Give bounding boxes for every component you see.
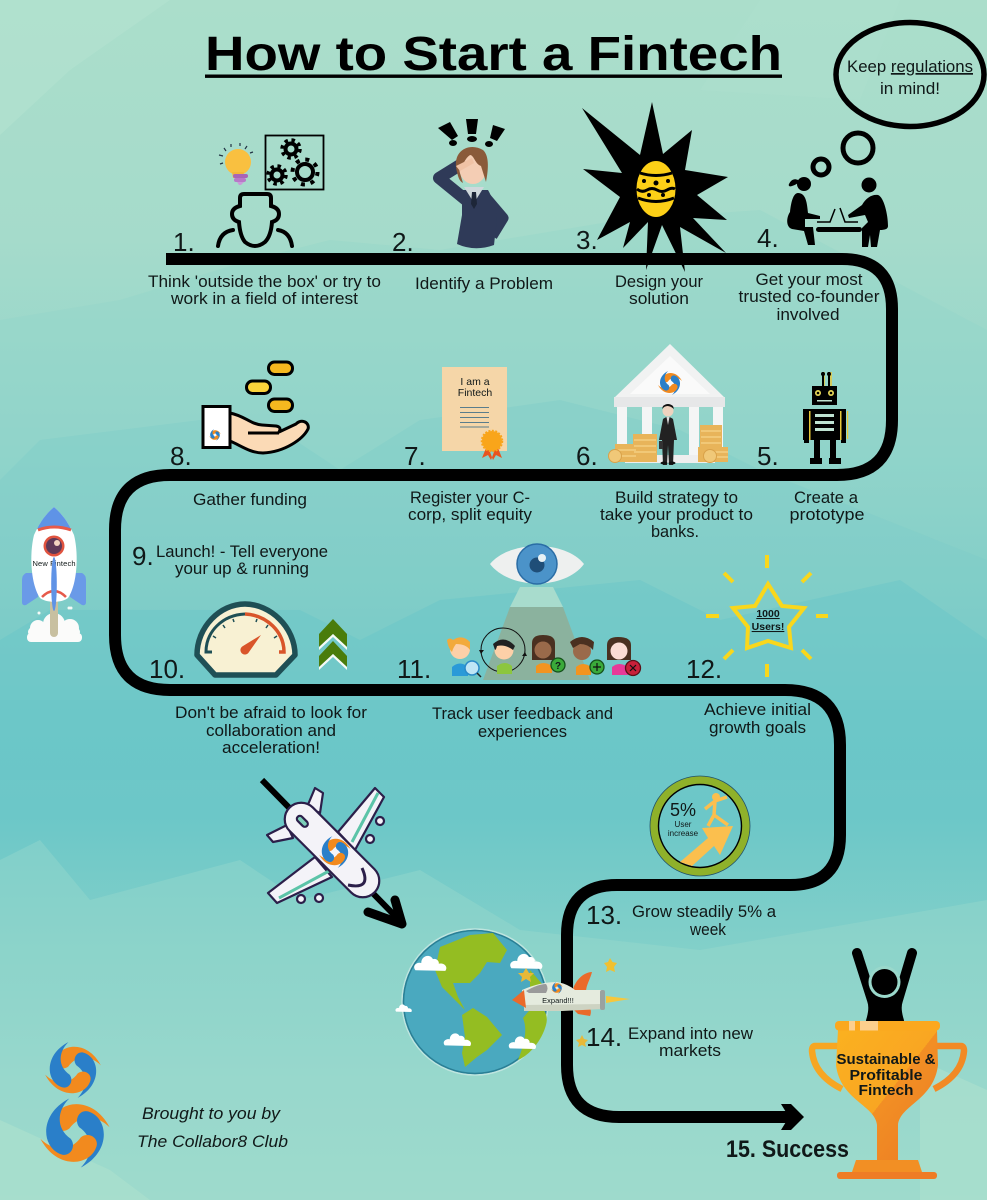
icon: person lifting trophy: Profitable xyxy=(850,1067,922,1084)
step 4 caption: involved xyxy=(776,305,840,324)
step number 12: 12. xyxy=(686,654,722,684)
icon: expand rocket ship xyxy=(512,958,630,1047)
step 5 caption xyxy=(790,488,864,524)
step 14 caption xyxy=(628,1024,754,1060)
thought bubble: keep regulations in mind: Keep regulations xyxy=(847,57,973,76)
icon: star badge 1000 users: Users! xyxy=(752,621,784,633)
step 4 xyxy=(738,177,888,324)
icon: gears box xyxy=(266,136,324,190)
icon: starburst with golden egg xyxy=(582,102,728,272)
credit text xyxy=(137,1104,288,1151)
step 3 caption xyxy=(615,272,703,308)
icon: incorporation certificate: I am a xyxy=(460,376,490,388)
icon: person lifting trophy: Fintech xyxy=(858,1082,914,1099)
roadmap path with arrow xyxy=(115,259,892,1130)
step number 9: 9. xyxy=(132,541,154,571)
icon: expand rocket ship: Expand!!! xyxy=(542,996,574,1005)
thought bubble: keep regulations in mind: in mind! xyxy=(880,79,940,98)
step 12 caption xyxy=(704,700,811,737)
thought bubble: keep regulations in mind xyxy=(813,22,984,175)
icon: five percent growth circle: 5% xyxy=(670,800,696,820)
step 7 caption: corp, split equity xyxy=(408,505,532,524)
step 8 caption: Gather funding xyxy=(193,490,307,509)
step 1 caption: work in a field of interest xyxy=(170,289,358,308)
step 12 xyxy=(686,555,828,737)
icon: hand catching coins xyxy=(203,362,308,453)
step 10 caption: collaboration and xyxy=(206,721,336,740)
step 3 xyxy=(576,102,728,308)
step 4 caption: Get your most xyxy=(756,270,863,289)
icon: airplane on flight arrow xyxy=(262,780,402,924)
icon: watching eye with beam xyxy=(483,544,590,680)
step 5 caption: Create a xyxy=(794,488,859,507)
step 11 xyxy=(397,544,640,741)
step 7 caption xyxy=(408,488,532,524)
step 13 caption: Grow steadily 5% a xyxy=(632,902,777,921)
icon: incorporation certificate xyxy=(442,367,507,460)
step 2 caption: Identify a Problem xyxy=(415,274,553,293)
step 11 caption xyxy=(432,704,613,741)
icon: star badge 1000 users: 1000 xyxy=(756,608,780,620)
step 14 xyxy=(586,1022,754,1060)
credit text: The Collabor8 Club xyxy=(137,1132,288,1151)
step 10 caption xyxy=(175,703,367,757)
icon: worried woman with exclamation marks xyxy=(438,119,505,248)
step number 5: 5. xyxy=(757,441,779,471)
step 6 caption: banks. xyxy=(651,522,699,541)
step number 3: 3. xyxy=(576,225,598,255)
icon: five percent growth circle xyxy=(650,776,750,876)
icon: person with hat xyxy=(218,194,292,246)
step 1 xyxy=(148,136,381,308)
step 13 xyxy=(586,900,777,939)
step number 14: 14. xyxy=(586,1022,622,1052)
step 2 xyxy=(392,119,553,293)
icon: co-founders at a table xyxy=(787,177,888,247)
step 12 caption: Achieve initial xyxy=(704,700,811,719)
icon: speedometer gauge xyxy=(197,604,295,675)
icon: person lifting trophy: Sustainable & xyxy=(836,1051,936,1068)
icon: star badge 1000 users xyxy=(706,555,828,677)
step 15: success label: 15. Success xyxy=(726,1136,849,1163)
step 12 caption: growth goals xyxy=(709,718,806,737)
step number 7: 7. xyxy=(404,441,426,471)
step number 11: 11. xyxy=(397,654,431,684)
icon: new fintech rocket xyxy=(22,507,86,642)
step 5 xyxy=(757,372,864,524)
step 9 xyxy=(22,507,328,642)
step 11 caption: experiences xyxy=(478,722,567,741)
step 9 caption: Launch! - Tell everyone xyxy=(156,542,328,561)
step 6 caption: take your product to xyxy=(600,505,753,524)
step 10 xyxy=(149,604,367,757)
step number 8: 8. xyxy=(170,441,192,471)
step 14 caption: markets xyxy=(659,1041,721,1060)
step 10 caption: acceleration! xyxy=(222,738,320,757)
icon: person lifting trophy xyxy=(812,953,964,1179)
credit text: Brought to you by xyxy=(142,1104,282,1123)
step number 1: 1. xyxy=(173,227,195,257)
step number 2: 2. xyxy=(392,227,414,257)
step 3 caption: solution xyxy=(629,289,689,308)
title: How to Start a Fintech xyxy=(205,28,782,81)
step 8 xyxy=(170,362,308,509)
step 9 caption: your up & running xyxy=(175,559,309,578)
step 6 caption: Build strategy to xyxy=(615,488,738,507)
step 11 caption: Track user feedback and xyxy=(432,704,613,723)
icon: five percent growth circle: User xyxy=(675,820,692,829)
step 5 caption: prototype xyxy=(790,505,864,524)
step 7 caption: Register your C- xyxy=(410,488,530,507)
step 3 caption: Design your xyxy=(615,272,703,291)
icon: robot prototype xyxy=(803,372,848,464)
step 6 caption xyxy=(600,488,753,541)
step 13 caption: week xyxy=(689,920,726,939)
icon: user group with feedback badges: ? xyxy=(555,661,561,672)
step 1 caption xyxy=(148,272,381,308)
icon: incorporation certificate: Fintech xyxy=(458,387,492,399)
step 13 caption xyxy=(632,902,777,939)
step 10 caption: Don't be afraid to look for xyxy=(175,703,367,722)
icon: user group with feedback badges xyxy=(447,628,640,677)
icon: green upward chevrons xyxy=(319,619,347,670)
step 7 xyxy=(404,367,532,524)
step 6 xyxy=(576,344,753,541)
step number 10: 10. xyxy=(149,654,185,684)
icon: five percent growth circle: increase xyxy=(668,829,699,838)
Collabor8 Club logo xyxy=(40,1042,110,1168)
icon: bank with banker and coins xyxy=(608,344,728,465)
step number 6: 6. xyxy=(576,441,598,471)
icon: light bulb xyxy=(219,143,253,185)
step number 4: 4. xyxy=(757,223,779,253)
step number 13: 13. xyxy=(586,900,622,930)
step 9 caption xyxy=(156,542,328,578)
step 4 caption: trusted co-founder xyxy=(738,287,880,306)
step 4 caption xyxy=(738,270,880,324)
icon: globe with clouds and stars xyxy=(395,929,548,1075)
step 14 caption: Expand into new xyxy=(628,1024,754,1043)
step 1 caption: Think 'outside the box' or try to xyxy=(148,272,381,291)
icon: new fintech rocket: New Fintech xyxy=(32,559,76,568)
